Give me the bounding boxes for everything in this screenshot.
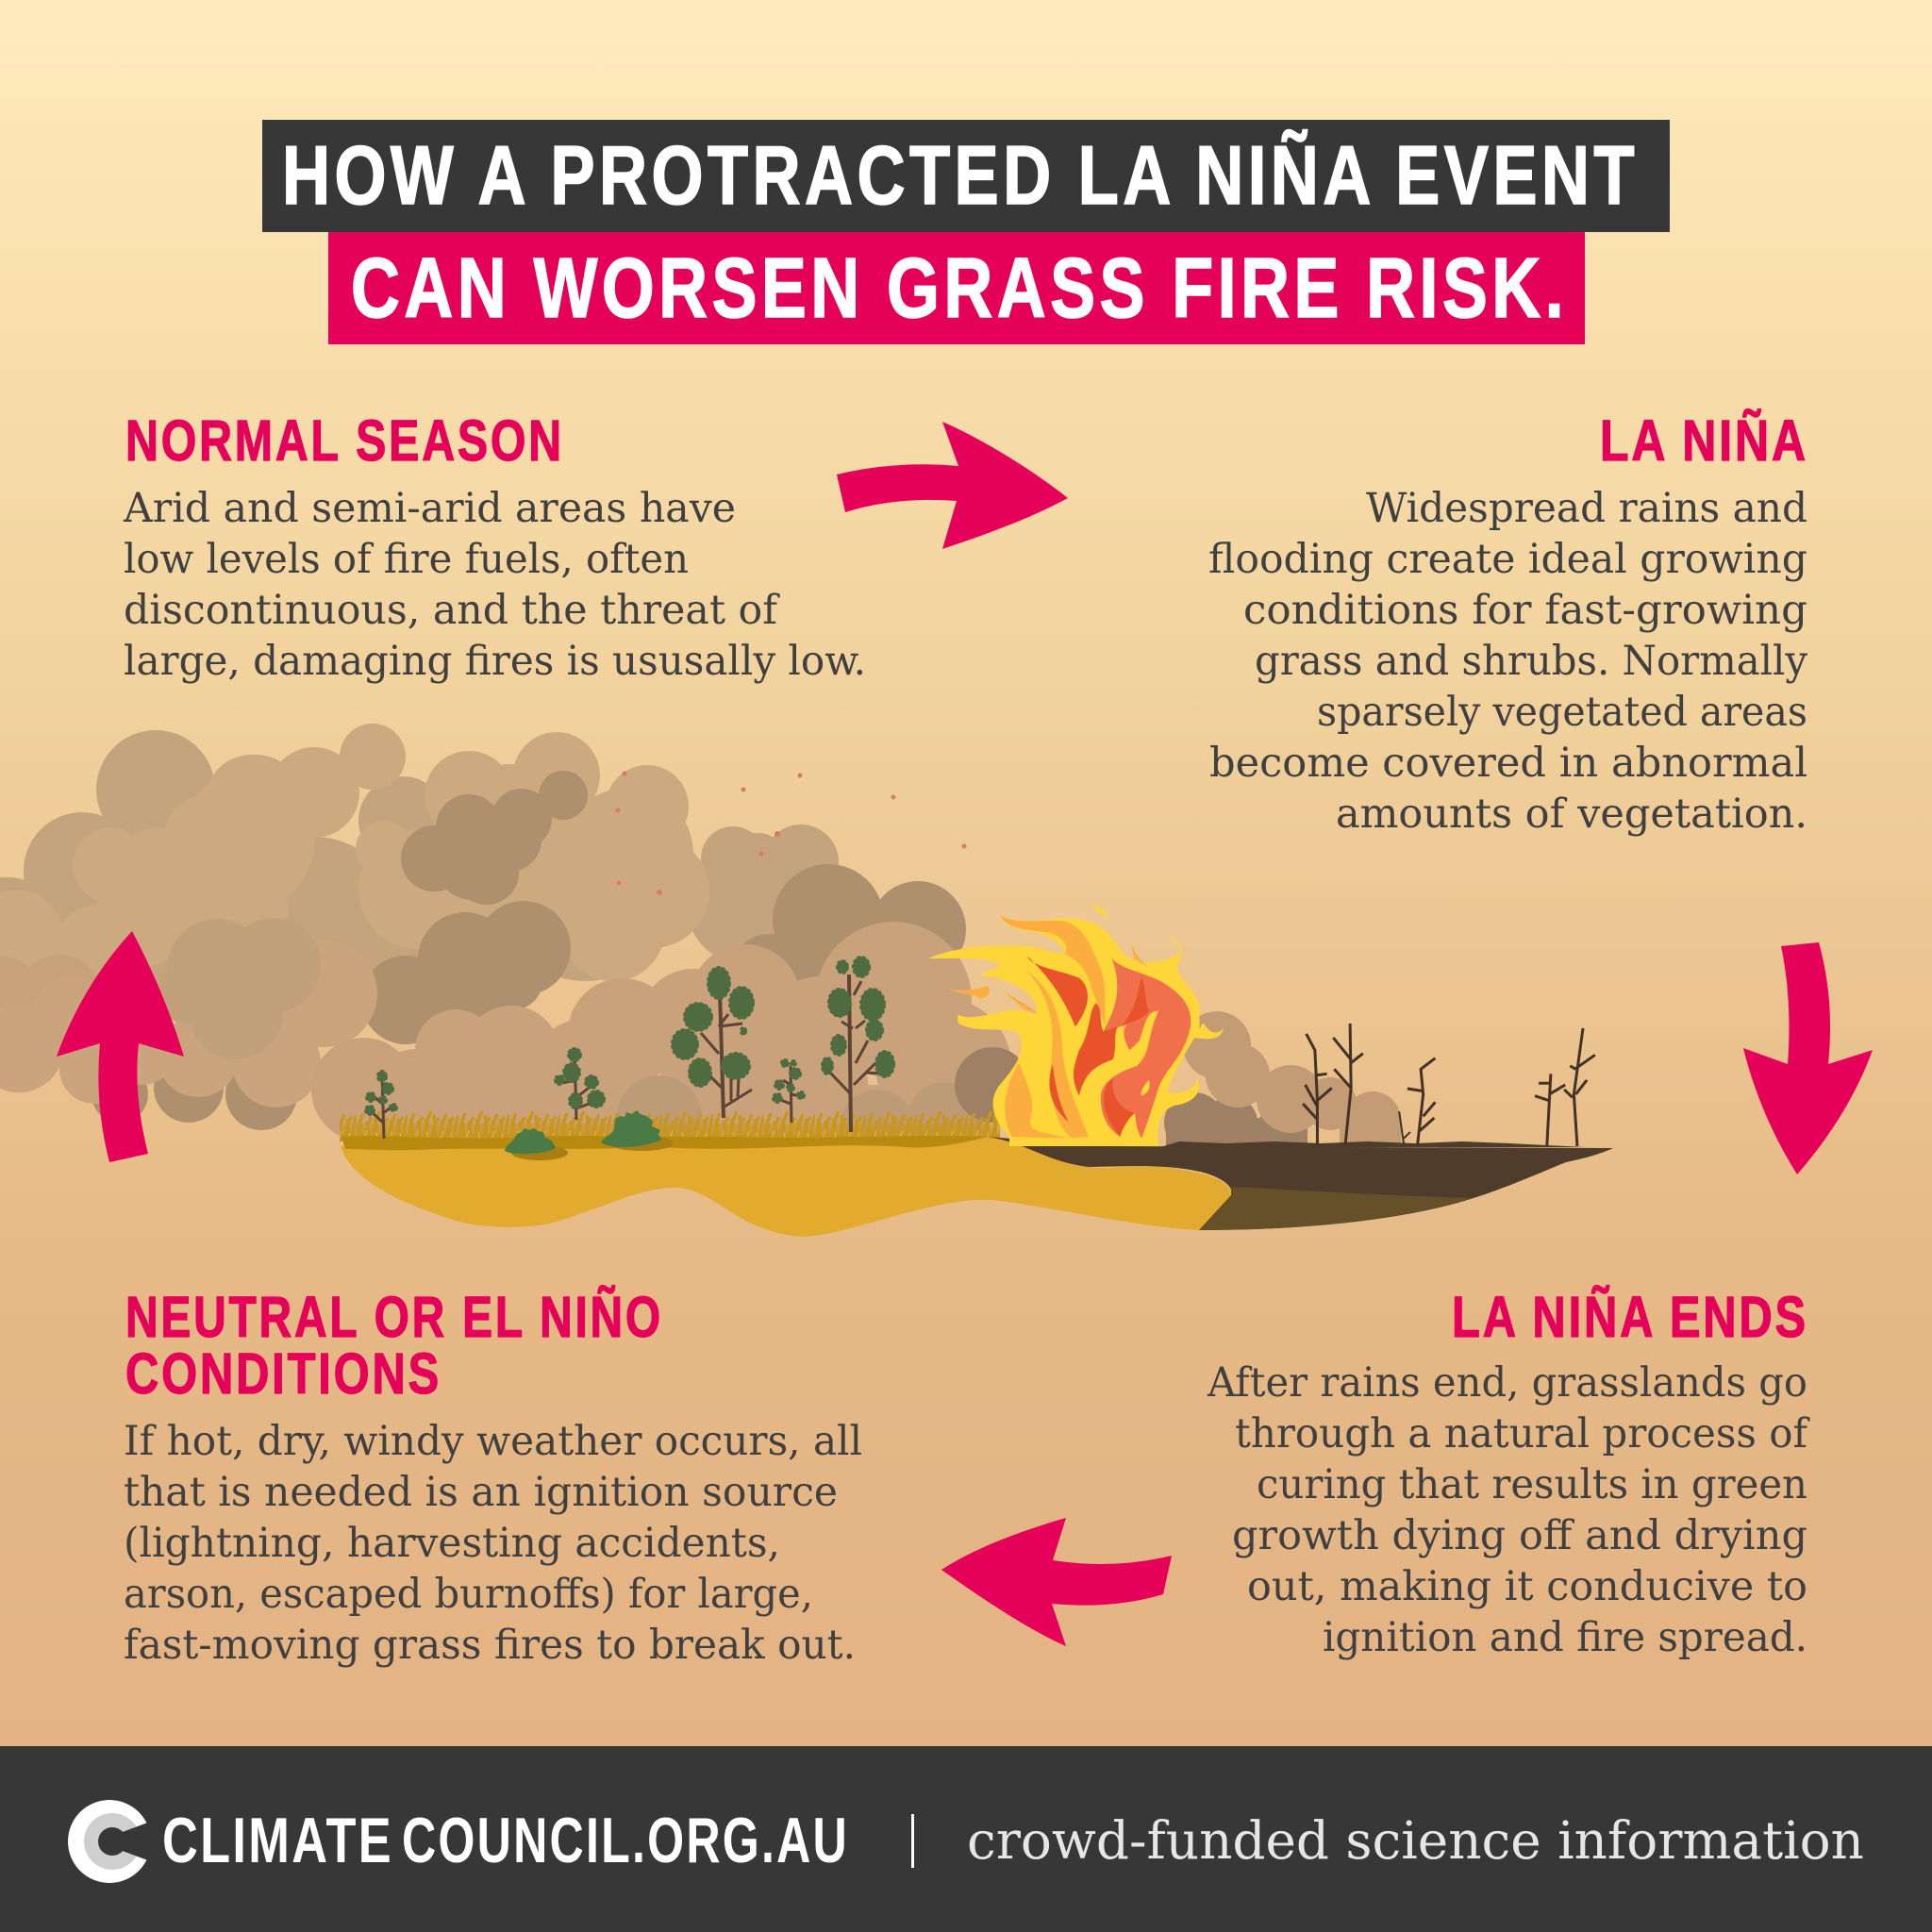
illustration: smoke, grassland and fire	[0, 724, 1613, 1237]
heading: neutral or el nino	[125, 1285, 663, 1406]
title line 2 bar: CAN WORSEN GRASS FIRE RISK.	[351, 242, 1568, 336]
heading: neutral or el nino: CONDITIONS	[125, 1341, 441, 1406]
text: neutral or el nino: arson, escaped burnoffs) for large,	[124, 1571, 813, 1618]
ground: yellow land	[341, 1136, 1231, 1237]
arrow: la nina to la nina ends	[1743, 942, 1873, 1174]
footer url: CLIMATE	[162, 1805, 393, 1876]
heading: la nina: LA NIÑA	[1600, 408, 1808, 473]
fire	[929, 903, 1224, 1146]
text: la nina ends: out, making it conducive to	[1247, 1563, 1807, 1610]
footer divider	[911, 1814, 914, 1868]
panel: neutral or el nino	[124, 1285, 862, 1669]
ground: burnt land	[988, 1137, 1613, 1230]
footer url: COUNCIL.ORG.AU	[402, 1805, 849, 1876]
panel: la nina ends	[1207, 1285, 1810, 1661]
arrow: neutral to normal season	[57, 931, 184, 1162]
text: la nina: sparsely vegetated areas	[1317, 689, 1807, 736]
text: la nina ends: through a natural process of	[1235, 1410, 1810, 1457]
embers	[615, 772, 966, 895]
text: la nina: grass and shrubs. Normally	[1255, 638, 1807, 685]
arrow: la nina ends to neutral	[941, 1518, 1172, 1646]
text: la nina ends: growth dying off and drying	[1232, 1512, 1807, 1559]
footer	[0, 1746, 1932, 1932]
footer url	[162, 1805, 849, 1876]
smoke clouds	[0, 724, 1011, 1165]
text: la nina ends	[1207, 1359, 1810, 1661]
title line 1 bar: HOW A PROTRACTED LA NIÑA EVENT	[282, 128, 1639, 222]
text: neutral or el nino: (lightning, harvesting accidents,	[124, 1520, 780, 1567]
text: la nina: flooding create ideal growing	[1208, 536, 1807, 583]
text: la nina: amounts of vegetation.	[1336, 791, 1807, 838]
text: neutral or el nino	[124, 1418, 862, 1669]
text: la nina	[1208, 485, 1807, 838]
title line 2 bar	[328, 232, 1585, 344]
icon: Climate Council logo	[68, 1800, 153, 1883]
trees	[365, 957, 894, 1139]
footer tagline: crowd-funded science information	[967, 1810, 1864, 1871]
dead trees	[1303, 1024, 1595, 1146]
arrow: normal season to la nina	[837, 422, 1068, 549]
heading: normal season: NORMAL SEASON	[125, 408, 564, 473]
distant smoke behind burnt land	[955, 1011, 1401, 1153]
text: normal season	[123, 485, 866, 685]
text: neutral or el nino: that is needed is an ignition source	[124, 1469, 838, 1516]
text: neutral or el nino: If hot, dry, windy weather occurs, all	[124, 1418, 862, 1465]
text: la nina: become covered in abnormal	[1209, 740, 1807, 787]
panel: la nina	[1208, 408, 1808, 838]
text: normal season: discontinuous, and the threat of	[124, 587, 780, 634]
panel: normal season	[123, 408, 866, 685]
text: la nina ends: After rains end, grasslands go	[1207, 1359, 1807, 1407]
text: normal season: Arid and semi-arid areas have	[123, 485, 736, 532]
text: normal season: large, damaging fires is ususally low.	[124, 638, 866, 685]
grass strip	[340, 1109, 1000, 1141]
text: la nina: conditions for fast-growing	[1243, 587, 1807, 634]
text: la nina ends: ignition and fire spread.	[1323, 1614, 1807, 1661]
heading: neutral or el nino: NEUTRAL OR EL NIÑO	[125, 1285, 663, 1349]
bushes	[505, 1110, 674, 1160]
text: la nina ends: curing that results in green	[1257, 1461, 1807, 1508]
title	[262, 120, 1670, 344]
text: normal season: low levels of fire fuels, often	[124, 536, 689, 583]
heading: la nina ends: LA NIÑA ENDS	[1452, 1285, 1808, 1349]
text: la nina: Widespread rains and	[1366, 485, 1807, 532]
text: neutral or el nino: fast-moving grass fires to break out.	[124, 1622, 856, 1669]
